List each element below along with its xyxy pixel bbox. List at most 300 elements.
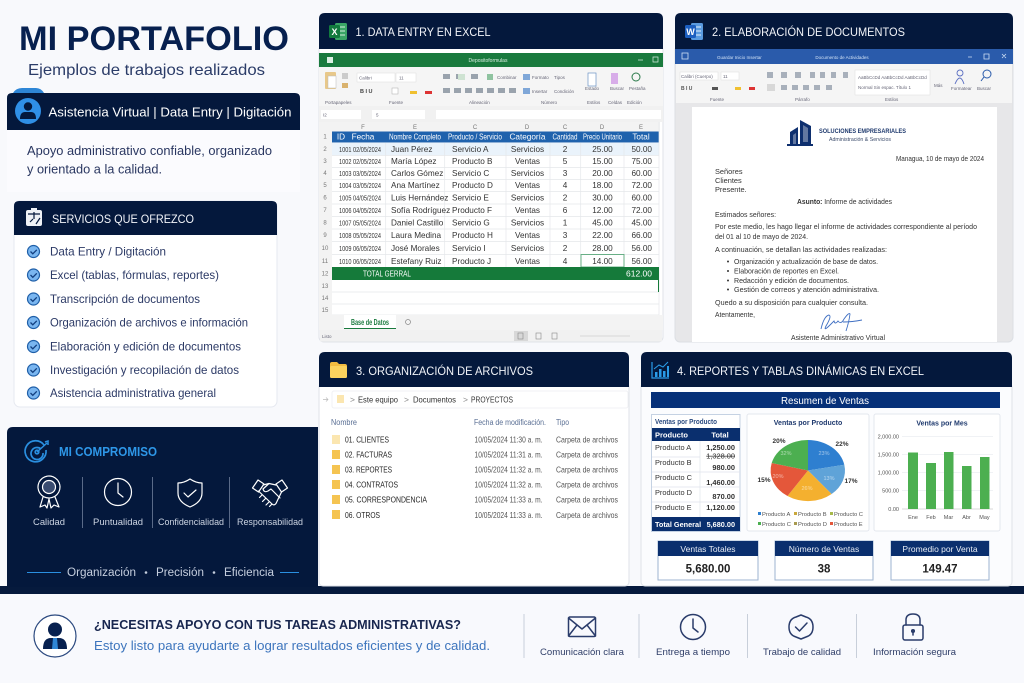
excel ribbon: Combinar: [497, 75, 517, 80]
bar chart axis labels: Mar: [944, 515, 953, 521]
file list rows: Carpeta de archivos: [556, 510, 618, 520]
commitment dividers: [82, 477, 230, 528]
pivot table: Producto D: [655, 488, 692, 497]
column letters: F: [361, 125, 365, 131]
selected cell: [581, 254, 624, 267]
column letters: D: [600, 125, 605, 131]
services list: Organización de archivos e información: [50, 316, 248, 330]
data rows: Servicio C: [452, 169, 489, 178]
data rows: 6: [563, 206, 568, 215]
panel: services: [14, 201, 277, 407]
pivot table: Producto B: [655, 458, 692, 467]
icon: envelope: [568, 617, 596, 636]
dark strip above footer: [0, 586, 1024, 594]
worksheet table: [319, 122, 660, 315]
data rows: Servicios: [511, 244, 544, 253]
services list: Elaboración y edición de documentos: [50, 340, 241, 354]
address bar: Documentos: [413, 394, 456, 404]
file list rows: 10/05/2024 11:31 a. m.: [474, 450, 542, 460]
pie legend: Producto E: [834, 522, 863, 528]
data rows: Estefany Ruiz: [391, 257, 442, 266]
bar chart axis labels: Ene: [908, 515, 918, 521]
pivot table: [652, 414, 740, 532]
pie chart: 23%: [818, 451, 830, 457]
kpi: average per sale: Promedio por Venta: [902, 544, 978, 554]
pivot table: 980.00: [712, 463, 735, 472]
table header row: Nombre Completo: [389, 132, 441, 142]
letter text: Managua, 10 de mayo de 2024: [896, 154, 984, 163]
call to action text: Estoy listo para ayudarte a lograr resultados eficientes y de calidad.: [94, 639, 490, 653]
excel title bar: Depositoformulas: [469, 58, 508, 64]
data rows: 50.00: [632, 145, 652, 154]
table header row: Total: [632, 132, 650, 142]
row numbers: 11: [322, 259, 329, 265]
services heading: SERVICIOS QUE OFREZCO: [52, 212, 194, 226]
data rows: 4: [563, 181, 568, 190]
pie chart: 13%: [823, 476, 835, 482]
kpi: total sales: Ventas Totales: [680, 544, 736, 554]
formula bar: I2: [323, 112, 327, 118]
bar chart card: Ventas por Mes: [916, 420, 968, 428]
banner heading: Asistencia Virtual | Data Entry | Digitación: [48, 104, 292, 120]
file list headers: [331, 418, 569, 427]
data rows: Servicios: [511, 145, 544, 154]
pivot table: 1,250.00: [706, 443, 735, 452]
data rows: 2: [563, 244, 568, 253]
letter text: Clientes: [715, 176, 742, 185]
icon: word: [685, 23, 703, 40]
data rows: 1006 04/05/2024: [339, 206, 381, 215]
data rows: 3: [563, 169, 568, 178]
pivot table: 870.00: [712, 492, 735, 501]
file list rows: 02. FACTURAS: [345, 450, 392, 460]
status bar: Listo: [322, 334, 332, 339]
data rows: Producto D: [452, 181, 493, 190]
row numbers: 13: [322, 284, 329, 290]
bars: [908, 452, 990, 509]
data rows: 1003 03/05/2024: [339, 169, 381, 178]
summary banner: [651, 392, 1000, 408]
services list: Investigación y recopilación de datos: [50, 363, 239, 377]
sheet tab bar: Base de Datos: [351, 318, 389, 327]
column letters: C: [473, 125, 478, 131]
signature: [821, 314, 862, 331]
data rows: 72.00: [632, 206, 652, 215]
panel 1: data entry in excel: [319, 13, 663, 342]
word title bar: Documento de Actividades: [815, 55, 869, 60]
pie legend: Producto C: [834, 512, 863, 518]
excel ribbon: [319, 67, 663, 106]
commitment labels: Calidad: [33, 517, 65, 528]
excel ribbon: Celdas: [608, 100, 623, 105]
formula bar: 5: [376, 112, 379, 118]
data rows: [339, 145, 652, 266]
data rows: 45.00: [592, 218, 613, 228]
word ribbon: Buscar: [977, 86, 992, 91]
pie labels: 22%: [835, 441, 849, 448]
icon: folder: [330, 362, 347, 378]
word ribbon: Calibri (Cuerpo): [681, 74, 713, 79]
icon: handshake: [252, 480, 288, 506]
footer labels: Entrega a tiempo: [656, 647, 730, 658]
letter text: Asistente Administrativo Virtual: [791, 333, 885, 342]
data rows: Ventas: [515, 206, 540, 215]
intro text: Apoyo administrativo confiable, organizado: [27, 143, 272, 158]
table header row: Precio Unitario: [583, 132, 622, 142]
kpi: number of sales: Número de Ventas: [789, 544, 859, 554]
letter text: Gestión de correos y atención administrativa.: [734, 285, 879, 294]
row numbers: 5: [323, 183, 327, 189]
icon: word: W: [686, 27, 695, 37]
panel 2 heading: 2. ELABORACIÓN DE DOCUMENTOS: [712, 24, 905, 39]
data rows: 1004 03/05/2024: [339, 181, 381, 190]
footer labels: Trabajo de calidad: [763, 647, 841, 658]
icon: target: [25, 441, 48, 462]
intro text: [27, 143, 272, 176]
file list rows: 03. REPORTES: [345, 464, 392, 474]
letter text: del 01 al 10 de mayo de 2024.: [715, 232, 808, 241]
data rows: 25.00: [592, 145, 613, 154]
data rows: 18.00: [592, 181, 613, 190]
data rows: Carlos Gómez: [391, 169, 443, 178]
excel ribbon: 11: [399, 76, 404, 80]
row numbers: 4: [323, 171, 327, 177]
total row: [332, 267, 659, 292]
file list rows: Carpeta de archivos: [556, 434, 618, 444]
footer labels: Información segura: [873, 647, 957, 658]
data rows: María López: [391, 157, 437, 166]
data rows: Luis Hernández: [391, 194, 448, 202]
icon: lock: [903, 614, 923, 640]
row numbers: 10: [322, 246, 329, 252]
word ribbon: Normal Sin espac. Título 1: [858, 85, 911, 90]
data rows: Servicios: [511, 169, 544, 178]
data rows: Juan Pérez: [391, 145, 432, 154]
file list rows: 10/05/2024 11:32 a. m.: [474, 464, 542, 474]
pie legend: Producto C: [762, 522, 791, 528]
column letters: E: [413, 125, 417, 131]
commitment labels: Responsabilidad: [237, 517, 303, 528]
title: MI PORTAFOLIO: [19, 20, 289, 58]
letter text: Por este medio, les hago llegar el informe de actividades correspondiente al período: [715, 222, 977, 231]
data rows: 1008 05/05/2024: [339, 231, 381, 240]
document page: [692, 107, 997, 342]
footer labels: Comunicación clara: [540, 647, 625, 658]
bar chart axis labels: 2,000.00: [878, 434, 899, 440]
column letters: C: [563, 125, 568, 131]
panel 4: excel reports: [641, 352, 1012, 586]
values line: Precisión: [156, 567, 204, 579]
kpi: total sales: [658, 541, 758, 580]
commitment heading: MI COMPROMISO: [59, 445, 157, 459]
pivot table: Producto E: [655, 503, 692, 512]
panel 3: file organization: [319, 352, 629, 586]
table header row: [332, 132, 659, 142]
commitment labels: [33, 517, 303, 528]
excel ribbon: Alineación: [469, 100, 490, 105]
total row: TOTAL GERRAL: [363, 268, 411, 278]
data rows: 56.00: [632, 257, 652, 266]
bar chart axis labels: 1,000.00: [878, 470, 899, 476]
kpi: total sales: 5,680.00: [686, 564, 730, 576]
word ribbon: B I U: [681, 86, 693, 92]
values line: Organización: [67, 567, 136, 579]
file list rows: 10/05/2024 11:30 a. m.: [474, 434, 542, 444]
icon: report chart: [652, 362, 669, 378]
excel ribbon: Número: [541, 100, 558, 105]
pivot table: 1,460.00: [706, 478, 735, 487]
file list headers: Nombre: [331, 418, 358, 427]
footer dividers: [524, 614, 856, 658]
sheet tab bar: [319, 315, 663, 330]
icon: person in circle: [34, 615, 76, 657]
kpi: average per sale: 149.47: [922, 564, 958, 576]
data rows: 2: [563, 194, 568, 202]
data rows: Producto F: [452, 206, 492, 215]
data rows: Ventas: [515, 181, 540, 190]
pivot table: 5,680.00: [707, 520, 735, 529]
file list rows: 01. CLIENTES: [345, 434, 389, 444]
pivot table: 1,120.00: [706, 503, 735, 512]
table header row: Producto / Servicio: [448, 132, 502, 142]
data rows: 1: [563, 218, 568, 228]
row numbers: 15: [322, 308, 329, 314]
excel ribbon: Portapapeles: [325, 100, 352, 105]
excel title bar: [319, 53, 663, 67]
letter text: Asunto: Informe de actividades: [797, 197, 892, 206]
icon: excel: X: [331, 27, 338, 37]
icon: shield: [178, 479, 202, 507]
services list: Asistencia administrativa general: [50, 386, 216, 400]
data rows: 3: [563, 231, 568, 240]
pivot table: Total General: [655, 520, 701, 529]
file list rows: 04. CONTRATOS: [345, 480, 398, 490]
pie chart card: Ventas por Producto: [774, 420, 842, 427]
panel 4 heading: 4. REPORTES Y TABLAS DINÁMICAS EN EXCEL: [677, 363, 924, 378]
word ribbon: Fuente: [710, 97, 725, 102]
letter text: Atentamente,: [715, 310, 755, 319]
intro text: y orientado a la calidad.: [27, 162, 162, 176]
company logo: [787, 120, 813, 146]
total row: 612.00: [626, 268, 652, 278]
data rows: Ana Martínez: [391, 181, 440, 190]
word ribbon: 11: [723, 74, 728, 79]
bar chart axis labels: [878, 434, 990, 521]
letter text: Presente.: [715, 185, 747, 194]
panel 3 heading: 3. ORGANIZACIÓN DE ARCHIVOS: [356, 363, 533, 378]
data rows: Ventas: [515, 257, 540, 266]
formula bar: [319, 106, 663, 122]
data rows: 45.00: [632, 218, 652, 228]
data rows: 2: [563, 145, 568, 154]
row numbers: 12: [322, 272, 329, 278]
letter text: Señores: [715, 167, 743, 176]
data rows: 56.00: [632, 244, 652, 253]
data rows: José Morales: [391, 244, 440, 253]
values line: Eficiencia: [224, 567, 275, 579]
pivot table: Producto A: [655, 443, 691, 452]
data rows: 1009 06/05/2024: [339, 244, 381, 253]
data rows: Producto H: [452, 231, 493, 240]
icon: quality badge: [789, 615, 813, 639]
data rows: Daniel Castillo: [391, 218, 444, 228]
data rows: 75.00: [632, 157, 652, 166]
bar chart axis labels: May: [979, 515, 990, 521]
commitment labels: Confidencialidad: [158, 517, 224, 528]
data rows: 28.00: [592, 244, 613, 253]
data rows: 72.00: [632, 181, 652, 190]
word title bar: [675, 49, 1013, 64]
pie legend: Producto A: [762, 512, 790, 518]
bar chart card: [874, 414, 1000, 531]
row numbers: 9: [323, 233, 327, 239]
data rows: 1002 02/05/2024: [339, 157, 381, 166]
company tagline: Administración & Servicios: [829, 137, 891, 143]
data rows: Servicio E: [452, 194, 489, 202]
letter text: Elaboración de reportes en Excel.: [734, 266, 839, 276]
data rows: 12.00: [592, 206, 613, 215]
data rows: 20.00: [592, 169, 613, 178]
file list headers: Fecha de modificación.: [474, 418, 546, 427]
data rows: 1001 02/05/2024: [339, 145, 381, 154]
data rows: 15.00: [592, 157, 613, 166]
data rows: 60.00: [632, 194, 652, 202]
row numbers: 2: [323, 147, 327, 153]
table header row: Fecha: [352, 132, 375, 142]
word ribbon: [676, 64, 1012, 103]
column letters: [361, 125, 643, 131]
services list: Excel (tablas, fórmulas, reportes): [50, 268, 219, 282]
company name: SOLUCIONES EMPRESARIALES: [819, 128, 906, 135]
panel: role banner: [7, 88, 300, 192]
bar chart axis labels: 1,500.00: [878, 452, 899, 458]
pie legend: [758, 512, 863, 528]
excel ribbon: Edición: [627, 100, 642, 105]
row numbers: 14: [322, 296, 329, 302]
icon: footer clock: [680, 614, 706, 640]
data rows: Laura Medina: [391, 231, 442, 240]
excel ribbon: Calibri: [359, 76, 372, 80]
pivot table: 1,328.00: [706, 452, 735, 460]
row numbers: 1: [323, 134, 327, 140]
icon: award: [38, 476, 60, 508]
row numbers: 8: [323, 220, 327, 226]
word ribbon: AaBbCcDd AaBbCcDd AaBbCcDd: [858, 75, 927, 80]
status bar: [320, 330, 662, 342]
file list rows: 05. CORRESPONDENCIA: [345, 494, 427, 504]
services list: [28, 244, 248, 400]
kpi: number of sales: [775, 541, 873, 580]
excel ribbon: Formato: [532, 75, 549, 80]
data rows: Servicio A: [452, 145, 489, 154]
file list rows: Carpeta de archivos: [556, 464, 618, 474]
panel 2: document editing: [675, 13, 1013, 342]
icon: clock: [104, 478, 132, 506]
subtitle: Ejemplos de trabajos realizados: [28, 62, 265, 79]
letter text: Organización y actualización de base de datos.: [734, 257, 878, 266]
summary banner: Resumen de Ventas: [781, 395, 869, 407]
data rows: 14.00: [592, 257, 613, 266]
word ribbon: Estilos: [885, 97, 899, 102]
services list: Data Entry / Digitación: [50, 244, 166, 258]
data rows: Producto J: [452, 257, 491, 266]
word ribbon: Formatear: [951, 86, 972, 91]
panel: commitment: [7, 427, 318, 587]
letter text: Estimados señores:: [715, 210, 776, 219]
call to action heading: ¿NECESITAS APOYO CON TUS TAREAS ADMINISTRATIVAS?: [94, 618, 461, 632]
data rows: 1010 06/05/2024: [339, 257, 381, 266]
pie labels: 20%: [772, 438, 786, 445]
data rows: Sofía Rodríguez: [391, 206, 450, 215]
data rows: 22.00: [592, 231, 613, 240]
row numbers: 7: [323, 208, 327, 214]
pie chart: 32%: [780, 451, 792, 457]
excel ribbon: Pestaña: [629, 86, 646, 91]
icon: excel: [329, 23, 347, 40]
address bar: >: [463, 394, 468, 404]
footer labels: [540, 647, 957, 658]
excel ribbon: Buscar: [610, 86, 625, 91]
pivot table: Producto: [655, 430, 688, 440]
column letters: E: [639, 125, 643, 131]
footer call to action: [0, 594, 1024, 683]
file list rows: 10/05/2024 11:33 a. m.: [474, 510, 542, 520]
table header row: Categoría: [510, 132, 546, 142]
pie legend: Producto D: [798, 522, 827, 528]
file list rows: 10/05/2024 11:33 a. m.: [474, 494, 542, 504]
file list rows: Carpeta de archivos: [556, 480, 618, 490]
data rows: 4: [563, 257, 568, 266]
file list headers: Tipo: [556, 418, 569, 427]
data rows: Servicios: [511, 194, 544, 202]
excel ribbon: Condición: [554, 89, 575, 94]
row numbers: 3: [323, 159, 327, 165]
values line: [27, 567, 299, 579]
kpi: average per sale: [891, 541, 989, 580]
address bar: >: [350, 394, 355, 404]
letter text: A continuación, se detallan las actividades realizadas:: [715, 245, 887, 254]
letter text: Quedo a su disposición para cualquier consulta.: [715, 298, 868, 307]
data rows: Ventas: [515, 157, 540, 166]
excel ribbon: Fuente: [389, 100, 404, 105]
bar chart axis labels: Abr: [962, 515, 971, 521]
excel ribbon: Tipos: [554, 75, 566, 80]
kpi: number of sales: 38: [818, 564, 831, 576]
word ribbon: Párrafo: [795, 97, 810, 102]
word ribbon: Más: [934, 83, 943, 88]
data rows: Servicio I: [452, 244, 486, 253]
letter text: Redacción y edición de documentos.: [734, 276, 849, 285]
data rows: 1005 04/05/2024: [339, 194, 381, 202]
data rows: 30.00: [592, 194, 613, 202]
pivot table: Ventas por Producto: [655, 419, 717, 426]
data rows: Producto B: [452, 157, 493, 166]
row numbers: 6: [323, 196, 327, 202]
data rows: Servicios: [511, 218, 544, 228]
pie labels: [757, 438, 858, 485]
data rows: 5: [563, 157, 568, 166]
pie chart: [771, 440, 845, 501]
address bar: [323, 391, 628, 408]
file list rows: [332, 434, 618, 520]
bar chart axis labels: 0.00: [888, 507, 899, 513]
data rows: Servicio G: [452, 218, 490, 228]
data rows: 66.00: [632, 231, 652, 240]
pie chart: 26%: [801, 486, 813, 492]
address bar: Este equipo: [358, 394, 398, 404]
services list: Transcripción de documentos: [50, 292, 200, 306]
pie legend: Producto B: [798, 512, 827, 518]
